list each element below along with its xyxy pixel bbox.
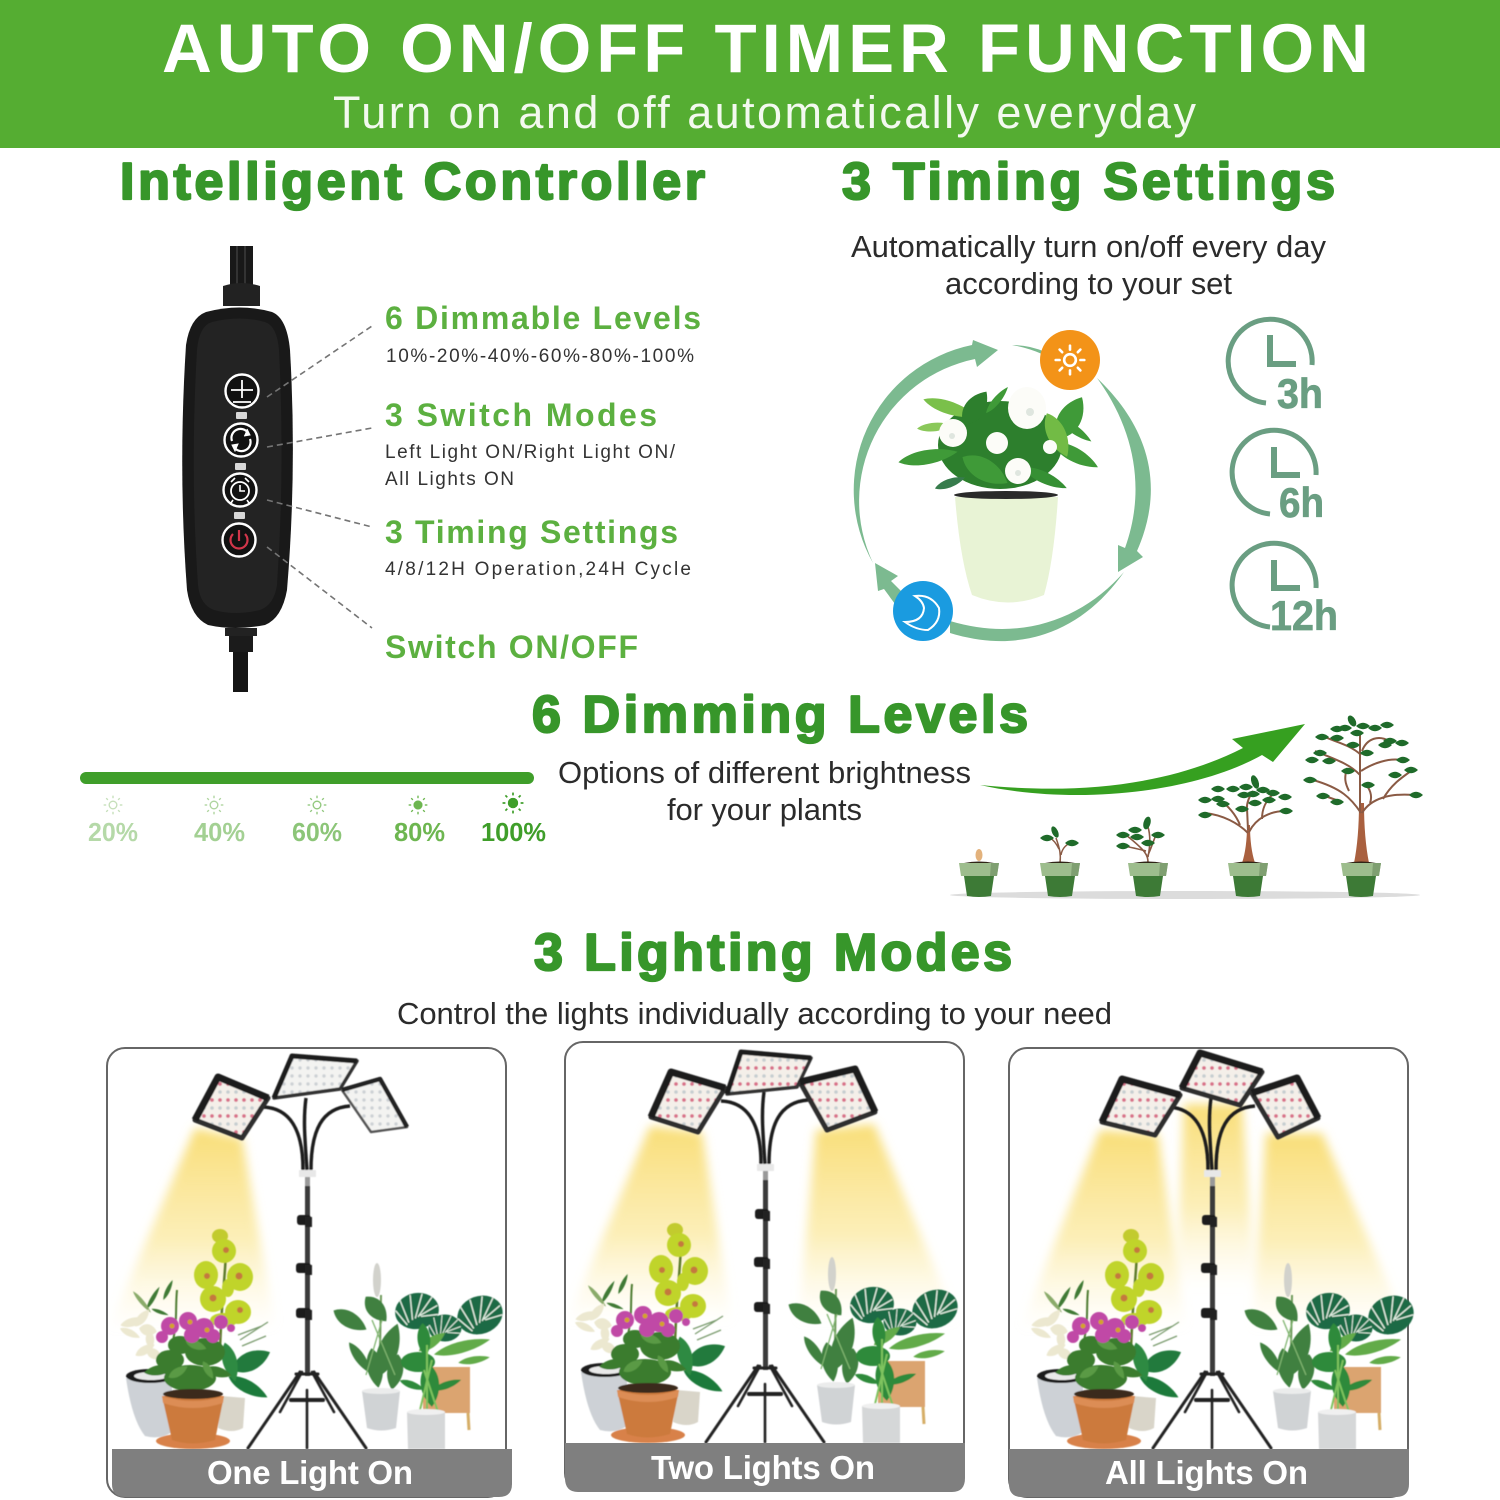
- heading: intelligent controller: Intelligent Controller: [120, 153, 705, 211]
- banner title: AUTO ON/OFF TIMER FUNCTION: [162, 10, 1369, 87]
- lighting modes description: Control the lights individually according to your need: [397, 996, 1112, 1031]
- caption bar: One Light On: [207, 1454, 413, 1491]
- timing description: according to your set: [945, 266, 1232, 301]
- stage: young tree: [1198, 774, 1293, 897]
- feature: 3 switch modes: 3 Switch Modes: [385, 397, 657, 433]
- icon: clock 6h: 6h: [1279, 479, 1324, 526]
- feature: 3 switch modes: Left Light ON/Right Light ON/: [385, 442, 676, 463]
- level 40%: 40%: [194, 817, 245, 847]
- heading: 6 dimming levels: 6 Dimming Levels: [532, 686, 1028, 744]
- plant growth stages: [950, 714, 1423, 899]
- panel: all lights on: [1009, 1048, 1419, 1497]
- panel: one light on: [107, 1048, 512, 1497]
- feature: switch on/off: Switch ON/OFF: [385, 629, 638, 665]
- button: dimmer: [226, 374, 258, 408]
- light beams: [1020, 1104, 1408, 1330]
- diagram: day night cycle: [854, 330, 1151, 641]
- feature: 3 switch modes: [385, 397, 676, 490]
- level 20%: 20%: [88, 817, 138, 847]
- timing description: Automatically turn on/off every day: [851, 229, 1326, 264]
- brightness description: [558, 755, 971, 827]
- potted gardenia: [897, 385, 1101, 602]
- lamp: left lit: [1102, 1079, 1180, 1135]
- feature: 6 dimmable levels: 6 Dimmable Levels: [385, 300, 701, 336]
- timing description: [851, 229, 1326, 301]
- level 80%: 80%: [394, 817, 445, 847]
- brightness bar: [80, 772, 534, 784]
- level 60%: [292, 796, 342, 847]
- light beam: [108, 1128, 276, 1330]
- caption bar: All Lights On: [1105, 1454, 1308, 1491]
- icon: clock 12h: [1232, 543, 1338, 639]
- feature: 3 switch modes: All Lights ON: [385, 469, 514, 490]
- cycle arrows: [854, 340, 1151, 641]
- level 20%: [88, 796, 138, 847]
- caption bar: Two Lights On: [651, 1449, 875, 1486]
- caption bar: [112, 1449, 512, 1497]
- button: power: [222, 524, 256, 556]
- feature: 3 timing settings: 3 Timing Settings: [385, 514, 678, 550]
- heading: 3 lighting modes: 3 Lighting Modes: [534, 924, 1012, 982]
- icon: clock 3h: [1228, 319, 1323, 417]
- lamp: middle off: [274, 1056, 357, 1098]
- button: mode: [224, 424, 258, 456]
- panel: two lights on: [565, 1042, 965, 1492]
- stage: seed: [959, 849, 999, 897]
- icon: clock 3h: 3h: [1277, 370, 1323, 417]
- lamp: middle: [727, 1052, 811, 1094]
- heading: 3 timing settings: 3 Timing Settings: [842, 153, 1335, 211]
- brightness description: Options of different brightness: [558, 755, 971, 790]
- button: timer: [224, 474, 256, 506]
- lamp: left lit: [651, 1072, 725, 1132]
- brightness description: for your plants: [667, 792, 862, 827]
- lamp: right off: [342, 1079, 407, 1132]
- arrow: growth: [980, 724, 1305, 795]
- header banner: [0, 0, 1500, 148]
- level 100%: [481, 793, 546, 847]
- lamp: middle lit: [1182, 1053, 1262, 1105]
- feature: 3 timing settings: [385, 514, 691, 580]
- stage: sprout: [1040, 825, 1080, 897]
- lamp: right lit: [800, 1069, 875, 1130]
- feature: 6 dimmable levels: 10%-20%-40%-60%-80%-100%: [386, 346, 694, 367]
- stage: seedling: [1116, 816, 1168, 897]
- icon: controller remote: [182, 246, 293, 692]
- lamp: left lit: [195, 1077, 268, 1138]
- feature: 3 timing settings: 4/8/12H Operation,24H Cycle: [385, 559, 691, 580]
- level 100%: 100%: [481, 817, 546, 847]
- icon: moon: [893, 581, 953, 641]
- feature: 6 dimmable levels: [385, 300, 701, 367]
- lamp: right lit: [1252, 1078, 1318, 1137]
- brightness scale: [88, 793, 546, 847]
- icon: sun: [1040, 330, 1100, 390]
- icon: clock 6h: [1232, 430, 1324, 526]
- level 60%: 60%: [292, 817, 342, 847]
- light beams: [566, 1124, 958, 1324]
- icon: clock 12h: 12h: [1270, 592, 1338, 639]
- level 80%: [394, 796, 445, 847]
- caption bar: [565, 1443, 965, 1492]
- banner subtitle: Turn on and off automatically everyday: [333, 87, 1196, 138]
- stage: mature tree: [1303, 714, 1423, 897]
- level 40%: [194, 796, 245, 847]
- caption bar: [1009, 1449, 1409, 1497]
